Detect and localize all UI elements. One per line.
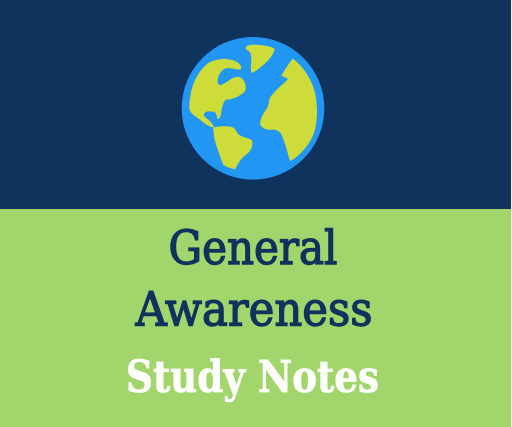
panel: green footer [0, 209, 511, 427]
subheading: Study Notes: Study Notes [126, 352, 379, 403]
continent: Greenland [246, 45, 275, 73]
heading: Awareness: Awareness [135, 282, 372, 338]
continent: North America [189, 59, 246, 128]
panel: navy header [0, 0, 511, 209]
continent: Europe and Africa [260, 59, 317, 161]
heading: General: General [168, 221, 338, 276]
icon: globe [182, 37, 324, 180]
continent: South America [213, 126, 252, 169]
globe ocean [182, 37, 324, 180]
